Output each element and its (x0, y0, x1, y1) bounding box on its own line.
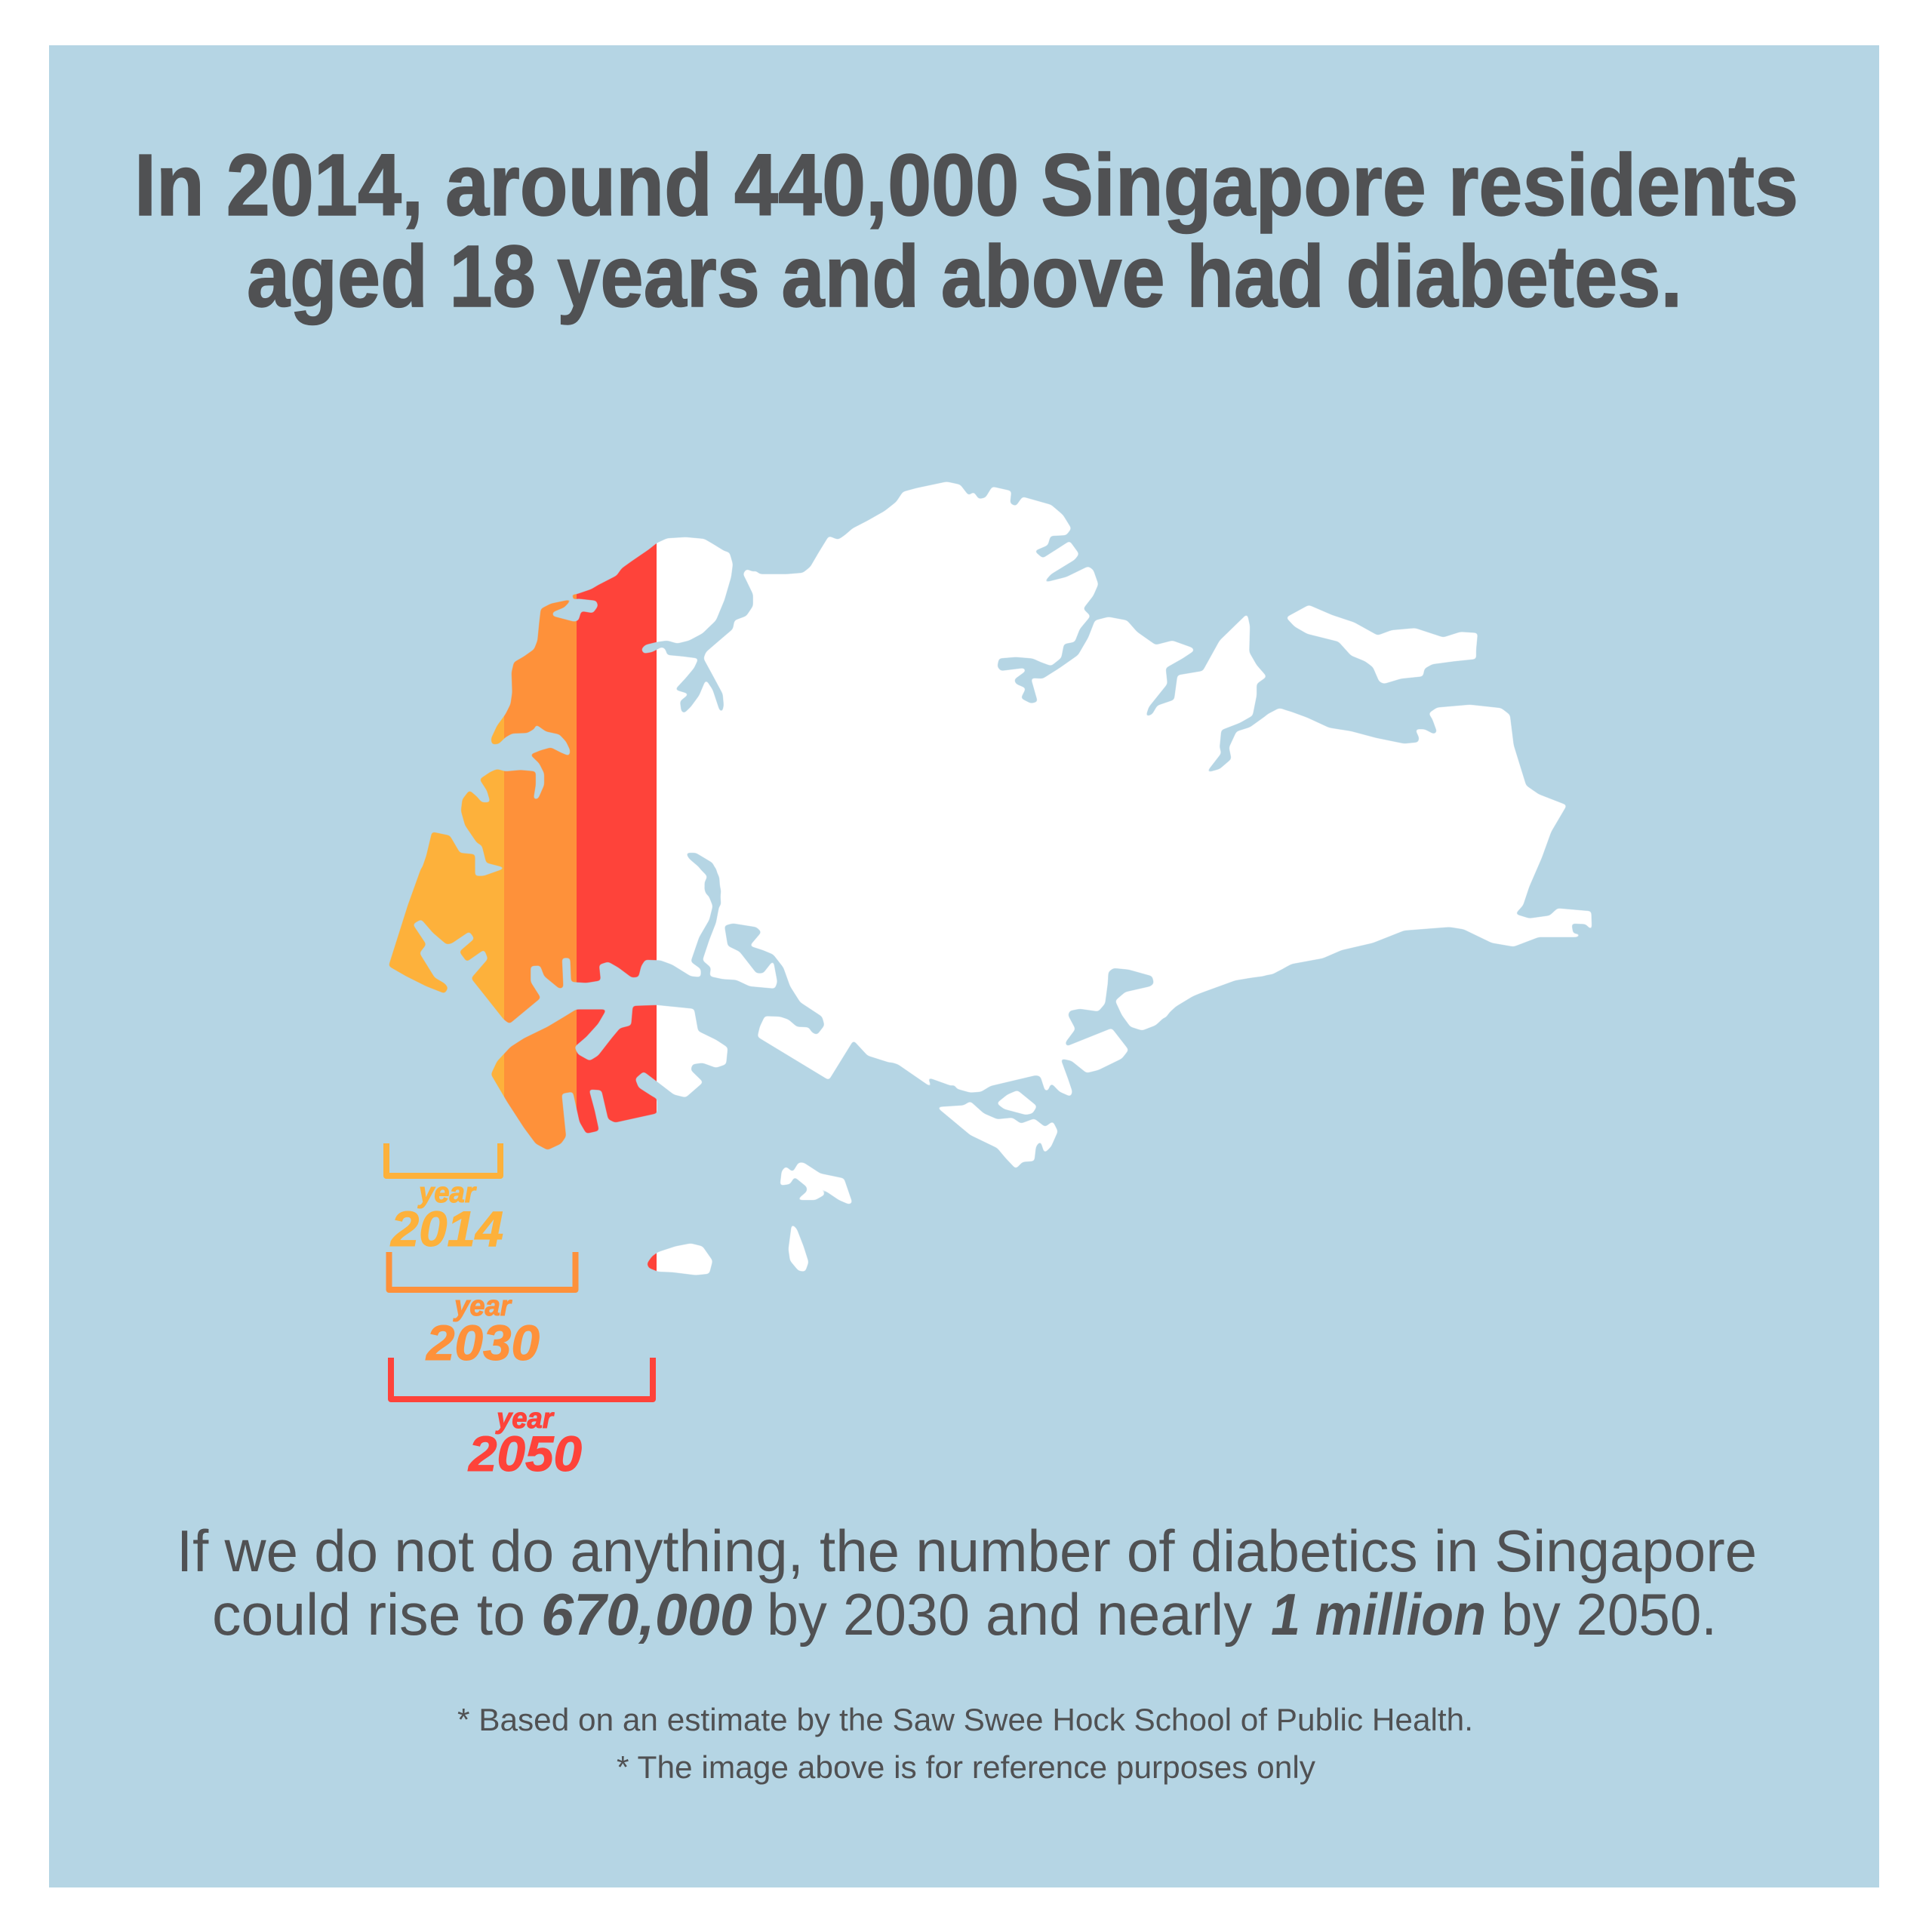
bracket and label: year 2030: 2030 (425, 1315, 540, 1371)
footnotes (457, 1702, 1473, 1785)
bracket and label: year 2014: year (417, 1177, 477, 1209)
bracket and label: year 2014: 2014 (389, 1201, 503, 1257)
title: aged 18 years and above had diabetes. (247, 227, 1682, 325)
bracket and label: year 2050 (391, 1358, 653, 1481)
text block: projection statement: 1 million (1271, 1581, 1486, 1647)
bracket and label: year 2030: year (453, 1291, 512, 1322)
text block: projection statement: If we do not do anything, the number of diabetics in Singapore (177, 1518, 1757, 1584)
bracket and label: year 2014 (386, 1143, 503, 1257)
text block: projection statement: could rise to (212, 1581, 525, 1647)
bracket and label: year 2050: 2050 (467, 1426, 582, 1481)
bracket and label: year 2050: year (495, 1403, 555, 1435)
title: In 2014, around 440,000 Singapore residents (134, 136, 1798, 234)
text block: projection statement: by 2050. (1501, 1581, 1717, 1647)
title (134, 136, 1798, 325)
text block: projection statement (177, 1518, 1757, 1647)
bracket and label: year 2030 (389, 1252, 575, 1371)
map: Singapore with coloured projection bands (389, 481, 1592, 1275)
footnotes: * The image above is for reference purposes only (617, 1749, 1315, 1785)
text block: projection statement: 670,000 (541, 1581, 752, 1647)
footnotes: * Based on an estimate by the Saw Swee Hock School of Public Health. (457, 1702, 1473, 1737)
text block: projection statement: by 2030 and nearly (767, 1581, 1252, 1647)
